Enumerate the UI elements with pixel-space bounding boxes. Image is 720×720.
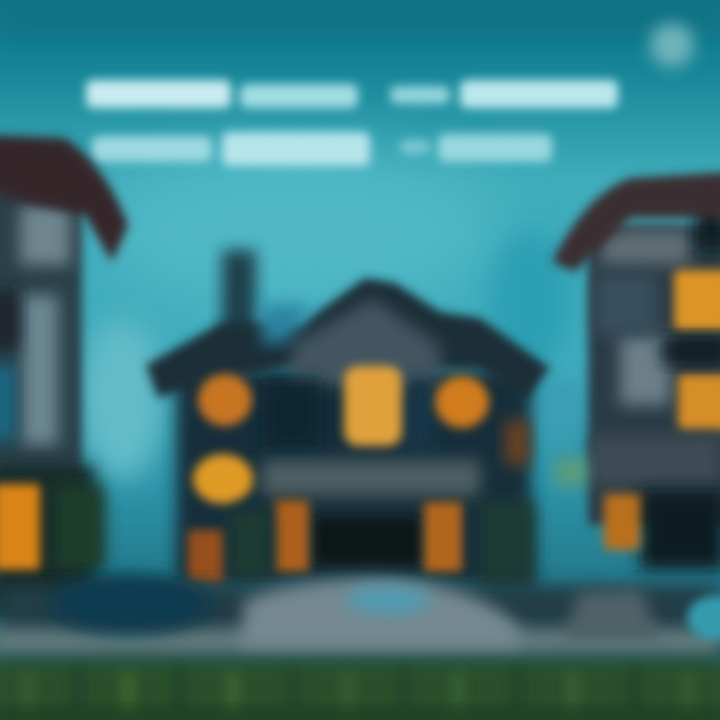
round window right (435, 376, 489, 428)
centre window (344, 366, 402, 446)
moon icon (650, 23, 694, 67)
foreground cars and ground (0, 574, 720, 657)
chimney (222, 250, 256, 340)
round window left (198, 374, 252, 426)
left roof (0, 135, 128, 262)
right upper window (674, 270, 720, 330)
garage opening (315, 518, 420, 564)
house body (176, 370, 531, 585)
right door (604, 494, 640, 550)
hedge (0, 660, 720, 720)
ground light band (0, 628, 720, 656)
grey car right (565, 588, 660, 640)
left building (0, 135, 128, 615)
title line 1 (86, 80, 618, 108)
porch band (262, 460, 480, 496)
right building (552, 172, 720, 570)
left window (0, 484, 40, 570)
dark blue car (50, 574, 210, 634)
silver car (240, 578, 518, 648)
roof (146, 278, 550, 400)
right roof (552, 172, 720, 272)
lower left window (193, 454, 253, 504)
title line 2 (92, 132, 552, 166)
central house (146, 250, 550, 590)
title: blurred text lines (86, 80, 618, 166)
right lower window (678, 374, 720, 430)
teal car edge (687, 596, 720, 640)
columns (275, 500, 309, 572)
